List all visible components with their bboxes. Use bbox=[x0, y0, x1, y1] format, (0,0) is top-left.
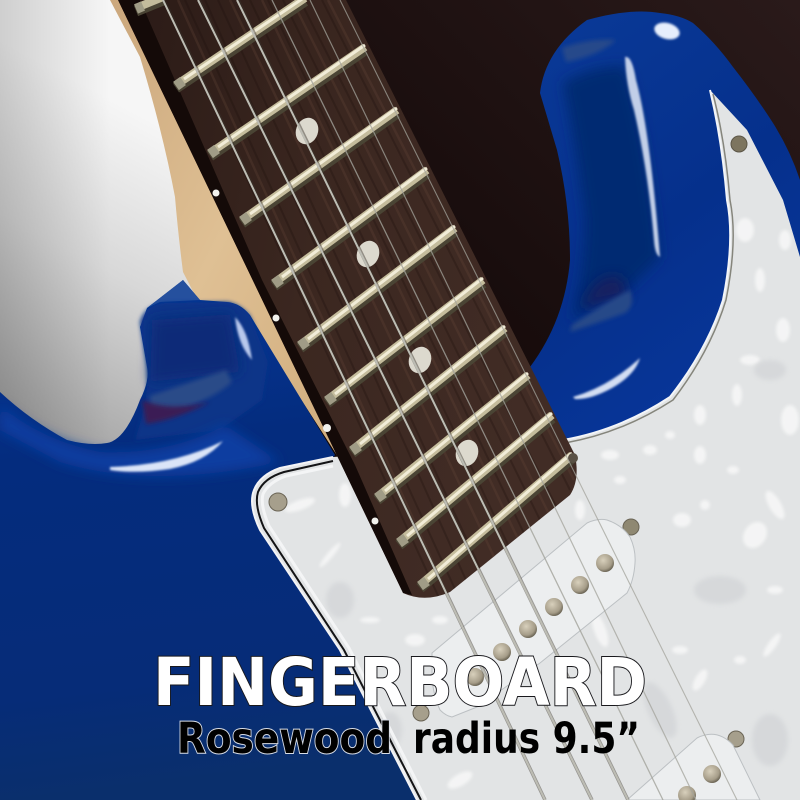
title: FINGERBOARD: FINGERBOARD bbox=[153, 644, 647, 721]
background: mirror left falloff bbox=[0, 0, 110, 460]
body highlight bbox=[110, 441, 223, 472]
subtitle: Rosewood: Rosewood bbox=[177, 714, 392, 764]
pickguard trim line bbox=[257, 461, 421, 800]
horn tip highlight bbox=[652, 20, 682, 42]
horn purple reflection bbox=[585, 276, 628, 310]
pickguard edge bevel bbox=[563, 90, 730, 440]
panel: lower guitar body in blue bbox=[0, 280, 420, 800]
neck pickup pole pieces bbox=[466, 554, 614, 686]
panel: pearl pickguard bbox=[240, 80, 800, 800]
panel: maple neck heel bbox=[110, 0, 340, 460]
pickguard horn grey trim bbox=[565, 94, 733, 443]
pickguard grey veins bbox=[326, 360, 788, 766]
wood light grain bbox=[178, 0, 574, 600]
horn rear face bbox=[147, 280, 200, 308]
horn slate reflection bbox=[570, 290, 632, 332]
fingerboard dark binding bbox=[118, 0, 412, 595]
horn front face bbox=[135, 302, 268, 440]
horn lower reflection bbox=[573, 358, 640, 399]
middle pickup cover bbox=[627, 734, 760, 800]
pickguard pearl flakes bbox=[283, 218, 799, 792]
pickguard left edge bbox=[252, 457, 417, 800]
frets bbox=[136, 0, 572, 588]
screws bbox=[269, 136, 747, 747]
horn shade bbox=[150, 314, 240, 382]
middle pickup pole pieces bbox=[678, 765, 721, 800]
horn slate reflection bbox=[150, 370, 232, 420]
guitar strings bbox=[163, 0, 737, 800]
inlay dots bbox=[292, 115, 482, 469]
background: white mirror cutout bbox=[0, 0, 200, 460]
binding dots bbox=[212, 190, 378, 524]
wood grain lines bbox=[248, 4, 570, 596]
horn purple reflection bbox=[142, 400, 210, 424]
horn top slate band bbox=[562, 40, 616, 62]
horn long highlight bbox=[625, 57, 660, 257]
body bright edge band bbox=[0, 405, 280, 476]
panel: upper guitar horn in blue bbox=[520, 12, 800, 445]
inner horn shadow bbox=[563, 66, 660, 320]
subtitle: radius 9.5: radius 9.5” bbox=[413, 714, 640, 764]
panel: rosewood fingerboard bbox=[118, 0, 577, 600]
pickguard inner white layer bbox=[262, 466, 426, 800]
neck pickup cover bbox=[432, 519, 635, 717]
body horn edge highlight bbox=[235, 317, 252, 360]
